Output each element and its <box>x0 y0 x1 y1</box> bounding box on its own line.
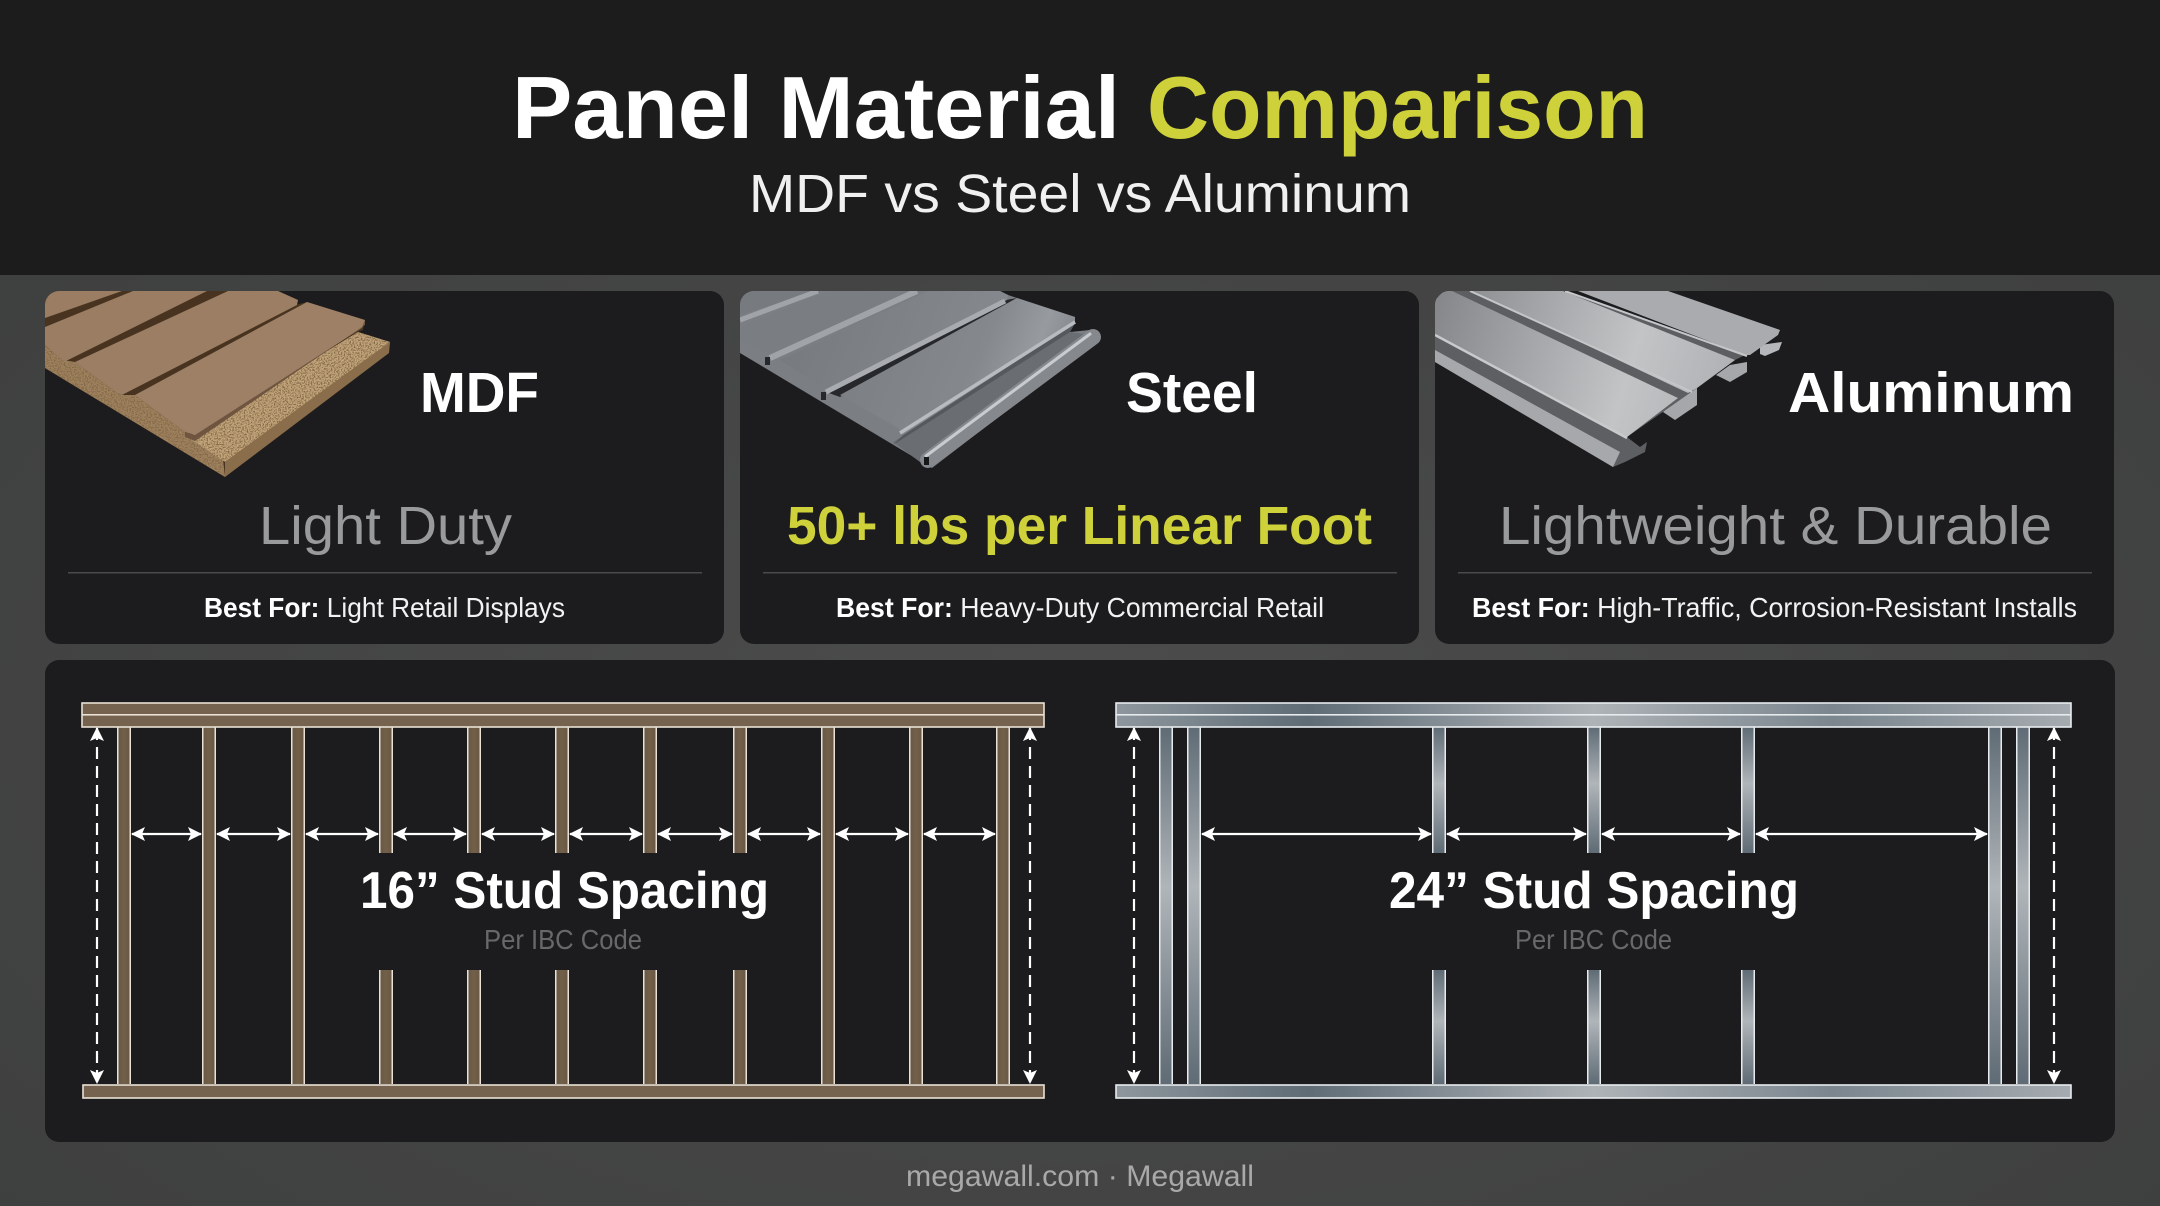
wood top plate <box>82 703 1044 727</box>
footer credit: megawall.com · Megawall <box>906 1160 1254 1193</box>
panel: MDF <box>45 291 724 644</box>
rating: lightweight and durable: Lightweight & Durable <box>1499 496 2052 556</box>
title <box>512 58 1648 157</box>
arrow: left height <box>1133 728 1135 1083</box>
arrow: right height <box>2053 728 2055 1083</box>
wood studs <box>117 727 1010 1084</box>
panel: Steel <box>740 291 1419 644</box>
arrows: stud spacing <box>132 833 995 835</box>
icon: MDF slatwall panel <box>45 291 390 477</box>
title: Comparison <box>1147 58 1648 157</box>
rating: load capacity: 50+ lbs per Linear Foot <box>787 496 1372 556</box>
label: per IBC code: Per IBC Code <box>484 924 642 955</box>
label: 16 inch stud spacing: 16” Stud Spacing <box>360 862 769 920</box>
icon: aluminum extrusion panel <box>1435 291 1782 467</box>
arrow: right height <box>1029 728 1031 1083</box>
arrows: stud spacing <box>1202 833 1987 835</box>
diagram: 24 inch steel stud framing <box>1116 703 2071 1098</box>
title: Panel Material <box>512 58 1120 157</box>
header band <box>0 0 2160 275</box>
panel: Aluminum <box>1435 291 2114 644</box>
best for: MDF: Best For: Light Retail Displays <box>204 592 565 623</box>
subtitle: MDF vs Steel vs Aluminum <box>749 164 1411 224</box>
icon: steel slatwall panel <box>740 291 1099 468</box>
diagram: 16 inch wood stud framing <box>82 703 1044 1098</box>
rating: light duty: Light Duty <box>259 496 512 556</box>
heading: Aluminum: Aluminum <box>1788 361 2074 425</box>
heading: MDF: MDF <box>420 361 539 425</box>
arrow: left height <box>96 728 98 1083</box>
best for: Aluminum: Best For: High-Traffic, Corrosion-Resistant Installs <box>1472 592 2077 623</box>
best for: Steel: Best For: Heavy-Duty Commercial Retail <box>836 592 1324 623</box>
label: 24 inch stud spacing: 24” Stud Spacing <box>1389 862 1799 920</box>
steel top plate <box>1116 703 2071 727</box>
wood bottom plate <box>83 1085 1044 1098</box>
label: per IBC code: Per IBC Code <box>1515 924 1672 955</box>
steel bottom plate <box>1116 1085 2071 1098</box>
steel studs <box>1159 727 2030 1084</box>
panel: stud spacing diagrams <box>45 660 2115 1142</box>
heading: Steel: Steel <box>1126 361 1258 425</box>
